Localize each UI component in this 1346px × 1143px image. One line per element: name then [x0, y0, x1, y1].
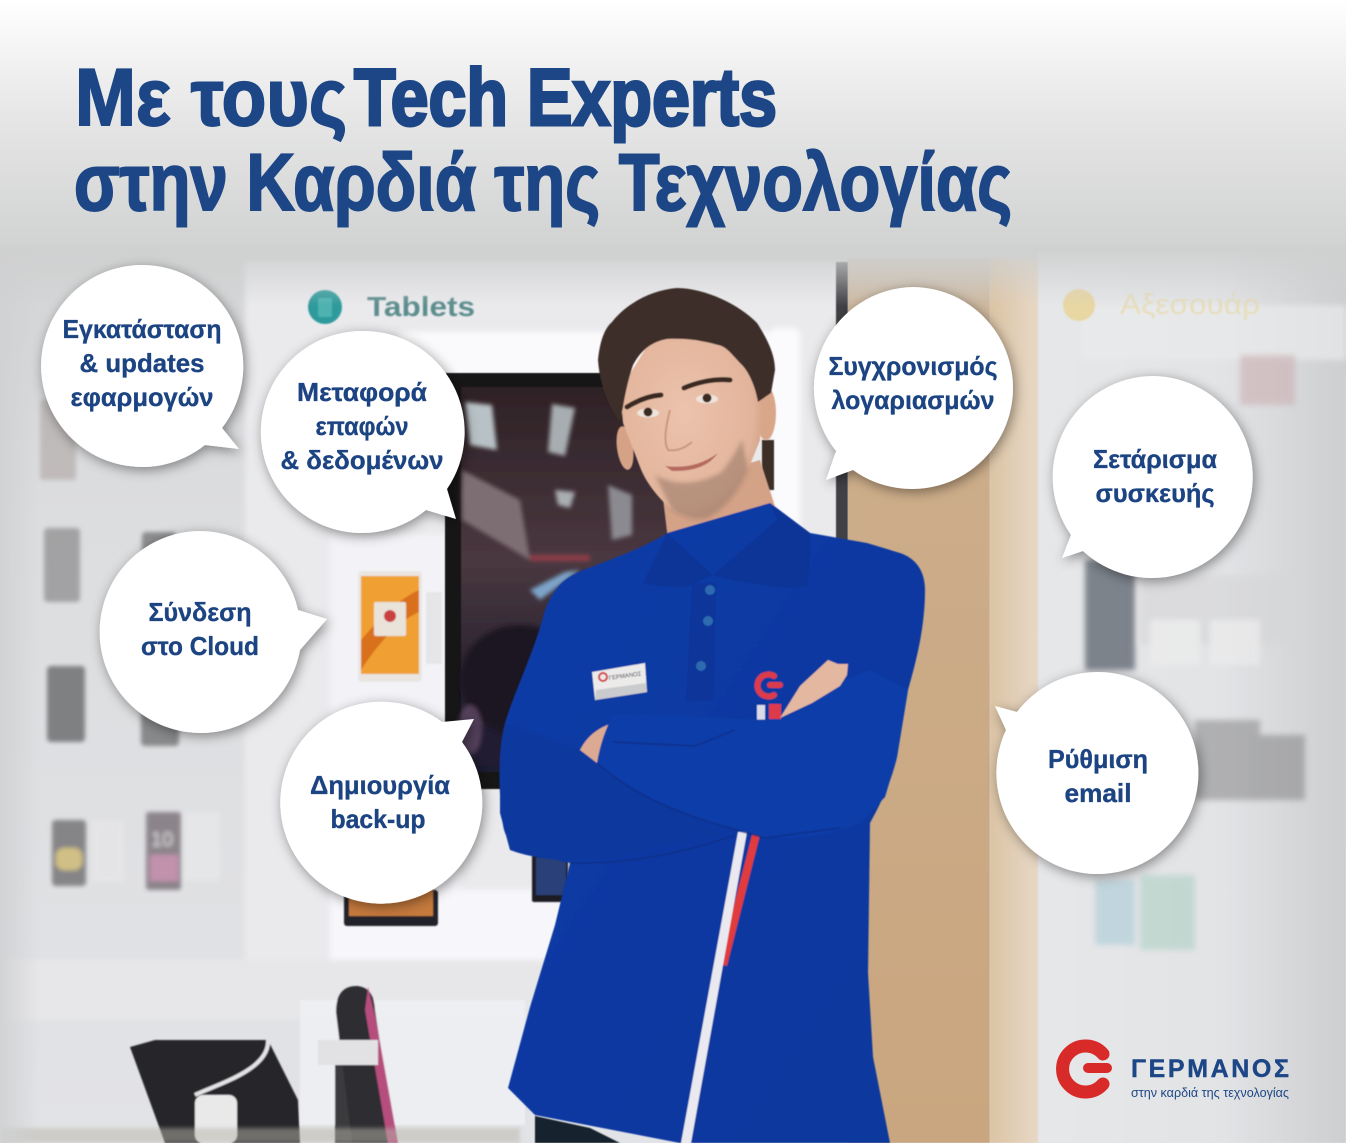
person: neck: [662, 460, 780, 578]
title: Με τους: [75, 53, 347, 143]
store: central white display wall: [0, 262, 840, 1020]
store: right wall shelf band: [1080, 305, 1346, 360]
store: black device stand on counter: [130, 986, 525, 1143]
background: blurred store scene: [0, 246, 1346, 1143]
title: στην Καρδιά της Τεχνολογίας: [74, 138, 1012, 228]
person: nose: [665, 410, 692, 450]
bubble: Σετάρισμα συσκευής: συσκευής: [1096, 478, 1214, 508]
icon: red G mark: [1063, 1046, 1112, 1092]
bubble: Ρύθμιση email: email: [1064, 778, 1132, 808]
store: large display screen: [445, 373, 774, 789]
person: beard stubble: [655, 440, 748, 519]
person: shirt body and sleeves: [499, 503, 925, 1143]
person: placket: [686, 583, 716, 702]
bubble: Δημιουργία back-up: [280, 702, 482, 904]
person: upper forearm: [597, 670, 908, 838]
person: trousers: [535, 1116, 620, 1143]
bubble: Μεταφορά επαφών & δεδομένων: [261, 331, 465, 533]
person: ear right: [756, 386, 776, 440]
store: lower small tablets: [344, 855, 568, 926]
person: name badge: ΓΕΡΜΑΝΟΣ: [608, 671, 642, 682]
person: ear left: [614, 425, 636, 471]
bubble: Ρύθμιση email: [995, 672, 1198, 874]
store: accessories sign: [1063, 289, 1260, 321]
person: face: [620, 325, 762, 519]
person: mouth: [665, 453, 718, 471]
store: left soft vignette: [0, 248, 40, 1143]
bubble: Εγκατάσταση & updates εφαρμογών: & updates: [80, 348, 204, 378]
bubble: Δημιουργία back-up: back-up: [330, 804, 426, 834]
bubble: Σετάρισμα συσκευής: [1053, 376, 1253, 578]
person: red stripe: [719, 831, 761, 966]
store: light wood column: [990, 258, 1040, 1143]
person: lower arm: [500, 723, 720, 860]
logo: ΓΕΡΜΑΝΟΣ: στην καρδιά της τεχνολογίας: [1131, 1085, 1289, 1100]
bubble: Εγκατάσταση & updates εφαρμογών: εφαρμογών: [70, 382, 214, 412]
bubble: Συγχρονισμός λογαριασμών: [814, 287, 1013, 489]
store: phones on left wall: [40, 400, 220, 890]
person: white stripe: [681, 832, 747, 1143]
person: arm fold shadows: [570, 730, 840, 863]
person: collar: [643, 503, 811, 588]
bubble: Εγκατάσταση & updates εφαρμογών: Εγκατάσταση: [62, 314, 222, 344]
logo: ΓΕΡΜΑΝΟΣ: ΓΕΡΜΑΝΟΣ: [1131, 1055, 1289, 1083]
bubble: Δημιουργία back-up: Δημιουργία: [310, 770, 450, 800]
person: hand on right: [780, 660, 848, 718]
bubble: Σετάρισμα συσκευής: Σετάρισμα: [1093, 444, 1217, 474]
store: phones on left wall: 10: [151, 829, 173, 851]
store: Tablets sign: [308, 290, 475, 324]
logo: ΓΕΡΜΑΝΟΣ: [1063, 1046, 1289, 1100]
store: counter surface: [0, 1128, 520, 1143]
bubble: Σύνδεση στο Cloud: στο Cloud: [141, 631, 259, 661]
store: top fade into header: [0, 246, 1346, 306]
title: [74, 53, 1012, 228]
person: shirt logo: [757, 675, 783, 720]
bubble: Συγχρονισμός λογαριασμών: λογαριασμών: [832, 385, 994, 415]
bubble: Ρύθμιση email: Ρύθμιση: [1048, 744, 1148, 774]
bubble: Συγχρονισμός λογαριασμών: Συγχρονισμός: [828, 351, 998, 381]
bubble: Εγκατάσταση & updates εφαρμογών: [41, 265, 243, 467]
bubble: Μεταφορά επαφών & δεδομένων: επαφών: [316, 411, 408, 441]
bubble: Μεταφορά επαφών & δεδομένων: & δεδομένων: [280, 445, 444, 475]
store: dark strip beside wood column: [836, 262, 848, 545]
background: gradient header band: [0, 0, 1346, 260]
store: Tablets sign: Tablets: [367, 291, 475, 322]
store: wood column: [848, 258, 990, 1143]
store: right wall accessories: [1085, 355, 1305, 950]
person: hand on left: [580, 723, 613, 764]
person: name badge: [592, 663, 647, 700]
store: accessories sign: Αξεσουάρ: [1120, 289, 1260, 321]
bubble: Σύνδεση στο Cloud: Σύνδεση: [148, 597, 252, 627]
store: tablet on white panel: [358, 571, 442, 682]
person: eyes: [637, 394, 718, 418]
person: eyebrows: [627, 380, 730, 407]
person: Tech Expert in blue polo: [499, 288, 925, 1143]
store: right wall: [1038, 252, 1346, 1143]
person: shirt buttons: [696, 585, 715, 671]
bubble: Σύνδεση στο Cloud: [100, 531, 327, 733]
bubble: Μεταφορά επαφών & δεδομένων: Μεταφορά: [297, 377, 427, 407]
person: hair: [598, 288, 775, 422]
title: Tech Experts: [354, 53, 777, 143]
